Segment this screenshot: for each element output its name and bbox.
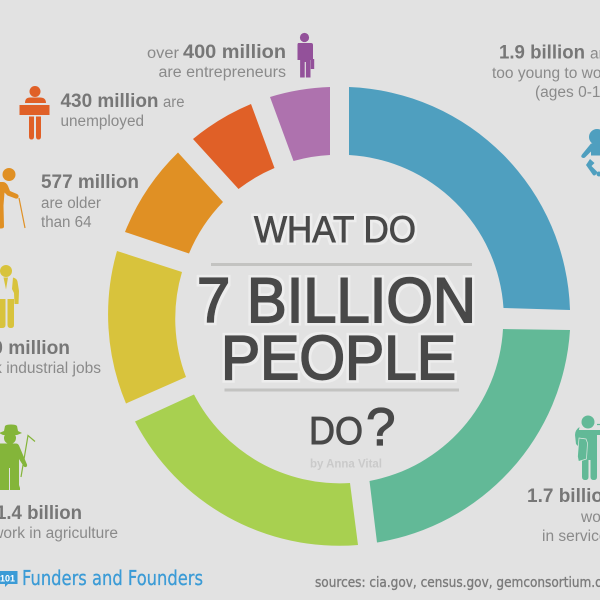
label: older than 64: are older [41,195,101,212]
title line: what do: WHAT DO [254,209,416,250]
label: entrepreneurs: over [147,45,179,62]
segment: agriculture [135,394,358,546]
label: older than 64: than 64 [41,214,92,231]
logo icon [0,571,18,587]
logo icon: 101 [0,574,15,584]
byline: by Anna Vital [310,458,382,470]
label: industrial jobs [0,338,101,377]
segment: unemployed [193,104,274,189]
label: entrepreneurs: 400 million [183,42,286,63]
label: too young to work: 1.9 billion [499,42,585,64]
icon: entrepreneur [297,33,314,78]
segment: older than 64 [125,152,223,254]
logo wordmark: Funders and Founders [22,566,203,590]
icon: elderly person with cane [0,168,25,228]
segment: industrial jobs [108,251,186,404]
icon: baby [581,129,600,176]
segment: entrepreneurs [270,87,330,161]
label: older than 64 [41,172,139,231]
label: older than 64: 577 million [41,172,139,193]
label: unemployed [60,91,184,130]
icon: service worker [575,416,600,480]
title line: 7 billion: 7 BILLION [197,266,476,336]
label: too young to work [492,42,600,101]
label: unemployed: unemployed [60,113,144,130]
title line: do: DO [309,410,363,453]
logo: funders and founders [0,566,203,590]
donut chart [108,87,570,546]
label: unemployed: 430 million [60,91,158,112]
icon: farmer with hoe [0,424,35,490]
label: unemployed: are [163,94,184,111]
title [197,209,476,457]
question mark: ? [366,398,395,457]
segment: services [370,329,570,542]
label: entrepreneurs: are entrepreneurs [158,64,286,81]
label: entrepreneurs [147,42,286,81]
title line: people: PEOPLE [221,324,456,393]
icon: unemployed person with sign [20,86,50,140]
segment: too young to work [349,87,570,310]
icon: industrial worker [0,265,19,328]
label: services [527,486,600,545]
label: agriculture [0,503,118,542]
